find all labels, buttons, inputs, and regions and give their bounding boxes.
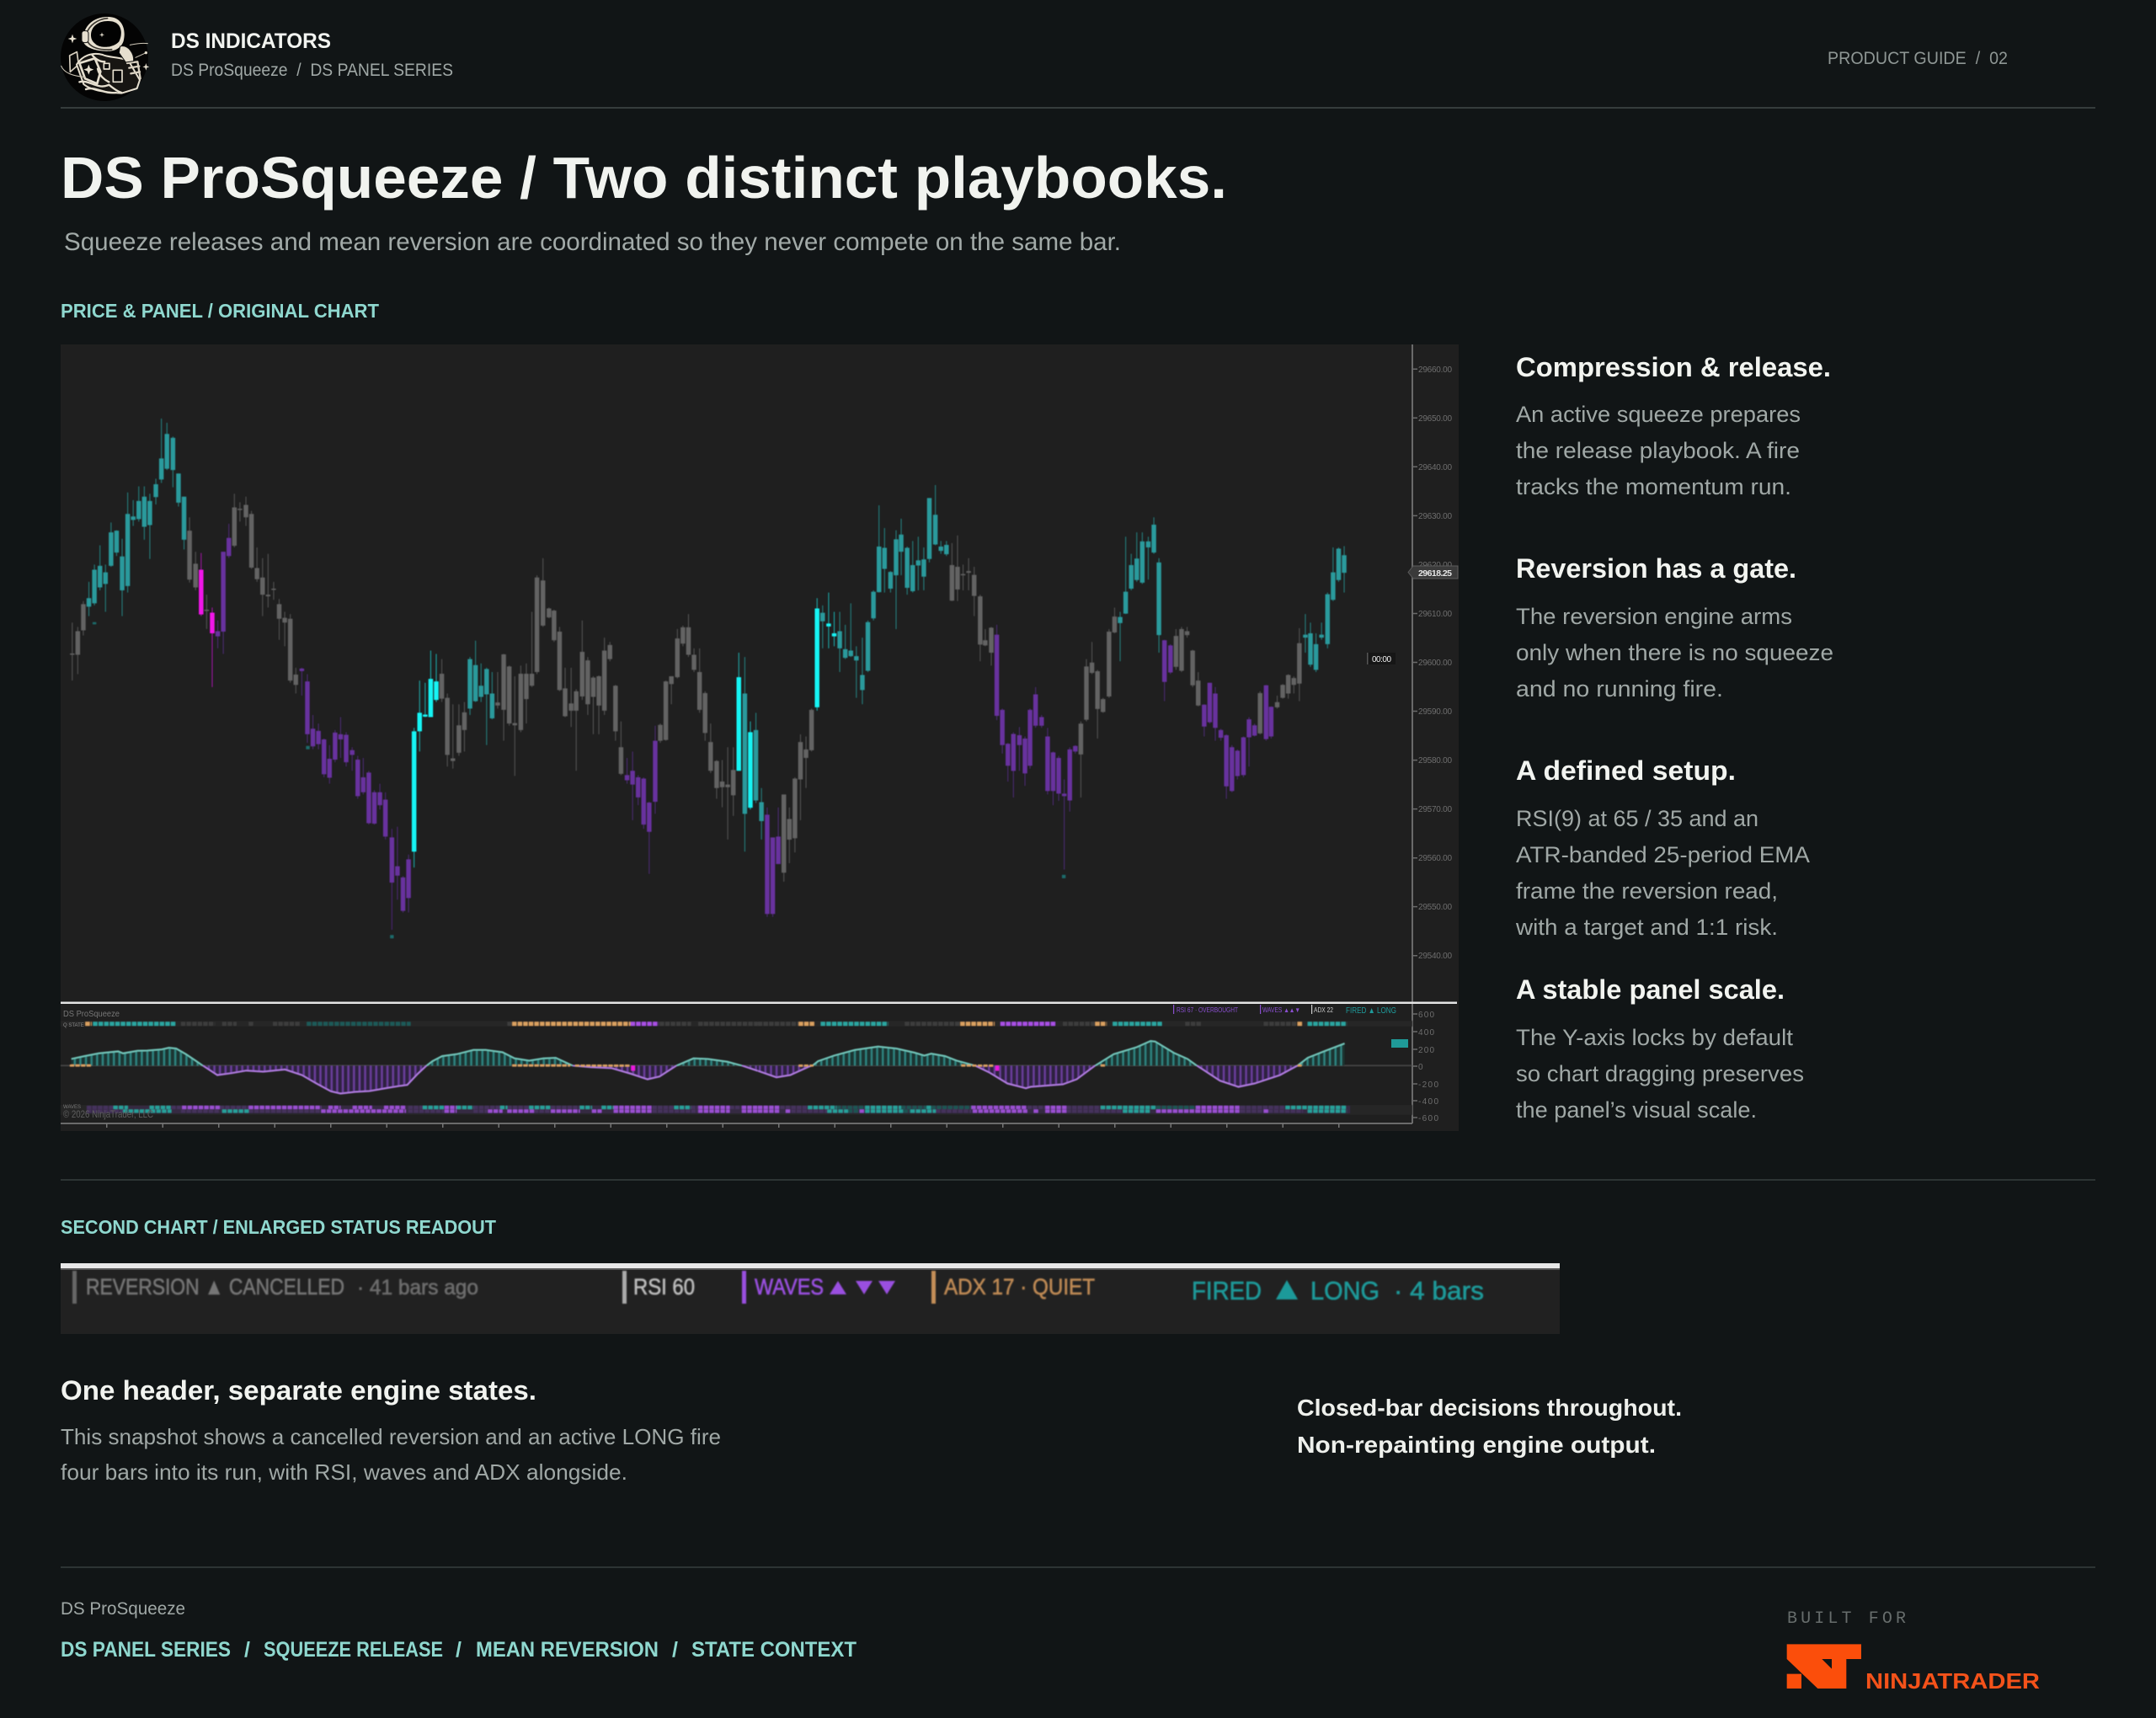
status: fired long: 4 bars [1410, 1276, 1484, 1305]
panel labels: WAVES [63, 1105, 81, 1110]
price axis: 29600.00 [1418, 659, 1452, 668]
text block: defined setup: RSI(9) at 65 / 35 and an [1516, 806, 1758, 831]
section label: second chart: SECOND CHART / ENLARGED STATUS READOUT [61, 1216, 496, 1238]
callout: closed-bar decisions [1297, 1395, 1682, 1458]
price axis: 29590.00 [1418, 707, 1452, 717]
footer: series links: / [244, 1638, 250, 1662]
text block: reversion gate: Reversion has a gate. [1516, 553, 1796, 584]
panel: DS ProSqueeze oscillator [61, 1005, 1438, 1125]
built for label: BUILT FOR [1787, 1609, 1906, 1629]
footer: series links: STATE CONTEXT [691, 1638, 857, 1662]
panel labels: WAVES ▲▲▼ [1262, 1006, 1300, 1014]
text block: stable panel scale: the panel’s visual scale. [1516, 1097, 1757, 1123]
footer: series links [61, 1638, 857, 1662]
status: fired long: FIRED [1192, 1276, 1262, 1305]
text block: defined setup [1515, 755, 1810, 940]
price axis: 29540.00 [1418, 952, 1452, 961]
panel axes: 600 [1418, 1011, 1434, 1020]
panel axes [61, 1011, 1438, 1125]
price axis: 29610.00 [1418, 610, 1452, 619]
text block: stable panel scale: The Y-axis locks by default [1516, 1025, 1794, 1050]
price axis: 29580.00 [1418, 756, 1452, 766]
status strips and histogram [61, 1021, 1412, 1115]
text block: one header: four bars into its run, with RSI, waves and ADX alongside. [61, 1459, 627, 1485]
text block: reversion gate [1516, 553, 1833, 702]
status: RSI: RSI 60 [633, 1274, 695, 1299]
text block: compression and release: the release playbook. A fire [1516, 438, 1800, 463]
status: reversion cancelled [72, 1271, 478, 1304]
bar timer: 00:00 [1372, 655, 1391, 664]
price axis: 29570.00 [1418, 805, 1452, 814]
section label: price and panel: PRICE & PANEL / ORIGINAL CHART [61, 300, 379, 322]
price axis: 29620.00 [1418, 561, 1452, 570]
status: waves: WAVES [755, 1274, 824, 1299]
text block: compression and release [1516, 352, 1831, 499]
footer: series links: / [672, 1638, 678, 1662]
icon: NinjaTrader logo: NINJATRADER [1865, 1668, 2040, 1694]
callout: closed-bar decisions: Non-repainting engine output. [1297, 1432, 1656, 1458]
icon: NinjaTrader logo [1787, 1644, 2040, 1694]
footer: series links: SQUEEZE RELEASE [264, 1638, 443, 1662]
header [61, 13, 2008, 101]
price axis: 29650.00 [1418, 414, 1452, 424]
price axis: 29560.00 [1418, 854, 1452, 863]
text block: compression and release: Compression & release. [1516, 352, 1831, 382]
price axis: 29660.00 [1418, 365, 1452, 375]
current price tag: 29618.25 [1418, 568, 1452, 579]
status: fired long [1192, 1276, 1484, 1305]
status: RSI [622, 1271, 695, 1304]
candlesticks [72, 419, 1344, 938]
text block: defined setup: frame the reversion read, [1516, 878, 1778, 904]
price axis: 29640.00 [1418, 463, 1452, 472]
panel axes: -200 [1418, 1080, 1438, 1090]
status: reversion cancelled: REVERSION ▲ CANCELLED [86, 1274, 344, 1299]
text block: one header: One header, separate engine states. [61, 1375, 536, 1406]
panel axes: -600 [1418, 1114, 1438, 1123]
status: ADX [931, 1271, 1095, 1304]
text block: defined setup: with a target and 1:1 risk. [1515, 915, 1778, 940]
brand subtitle: DS ProSqueeze / DS PANEL SERIES [171, 61, 453, 80]
bar timer [1367, 653, 1396, 664]
text block: compression and release: tracks the momentum run. [1516, 474, 1791, 499]
text block: reversion gate: The reversion engine arms [1516, 604, 1792, 629]
text block: reversion gate: only when there is no squeeze [1516, 640, 1833, 665]
text block: stable panel scale [1516, 974, 1804, 1123]
footer: product name: DS ProSqueeze [61, 1599, 185, 1619]
footer: series links: DS PANEL SERIES [61, 1638, 231, 1662]
text block: compression and release: An active squeeze prepares [1516, 402, 1801, 427]
subtitle: Squeeze releases and mean reversion are coordinated so they never compete on the same bar. [64, 228, 1121, 256]
chart: price and panel [61, 344, 1459, 1131]
panel axes: -400 [1418, 1097, 1438, 1107]
title: DS ProSqueeze / Two distinct playbooks. [61, 145, 1227, 211]
footer: series links: MEAN REVERSION [476, 1638, 659, 1662]
footer: series links: / [456, 1638, 462, 1662]
price axis [1412, 344, 1452, 1123]
panel divider [61, 1002, 1457, 1004]
panel labels: FIRED ▲ LONG [1346, 1006, 1396, 1016]
panel: enlarged status readout [61, 1263, 1560, 1334]
panel axes: 200 [1418, 1046, 1434, 1055]
panel axes: 400 [1418, 1028, 1434, 1038]
panel labels: © 2026 NinjaTrader, LLC [63, 1108, 153, 1120]
icon: astronaut logo [61, 13, 149, 101]
text block: defined setup: ATR-banded 25-period EMA [1516, 842, 1810, 867]
callout: closed-bar decisions: Closed-bar decisions throughout. [1297, 1395, 1682, 1421]
text block: stable panel scale: so chart dragging preserves [1516, 1061, 1804, 1086]
status: reversion cancelled: · 41 bars ago [357, 1276, 478, 1299]
status: fired long: · [1394, 1276, 1402, 1305]
status: waves [742, 1271, 895, 1304]
text block: stable panel scale: A stable panel scale. [1516, 974, 1785, 1005]
panel labels [63, 1005, 1408, 1120]
text block: one header: This snapshot shows a cancelled reversion and an active LONG fire [61, 1424, 721, 1449]
panel labels: RSI 67 · OVERBOUGHT [1177, 1006, 1238, 1014]
brand name: DS INDICATORS [171, 29, 331, 53]
panel axes: 0 [1418, 1063, 1423, 1072]
status: ADX: ADX 17 · QUIET [944, 1274, 1095, 1299]
price axis: 29630.00 [1418, 512, 1452, 521]
current price tag [1408, 566, 1458, 579]
text block: defined setup: A defined setup. [1516, 755, 1736, 786]
page tag: PRODUCT GUIDE / 02 [1828, 49, 2008, 68]
price axis: 29550.00 [1418, 903, 1452, 912]
text block: reversion gate: and no running fire. [1516, 676, 1723, 702]
panel labels: ADX 22 [1314, 1006, 1333, 1014]
status: fired long: LONG [1310, 1276, 1380, 1305]
panel labels: Q STATE [63, 1023, 84, 1028]
text block: one header [61, 1375, 721, 1485]
panel labels: DS ProSqueeze [63, 1010, 120, 1019]
